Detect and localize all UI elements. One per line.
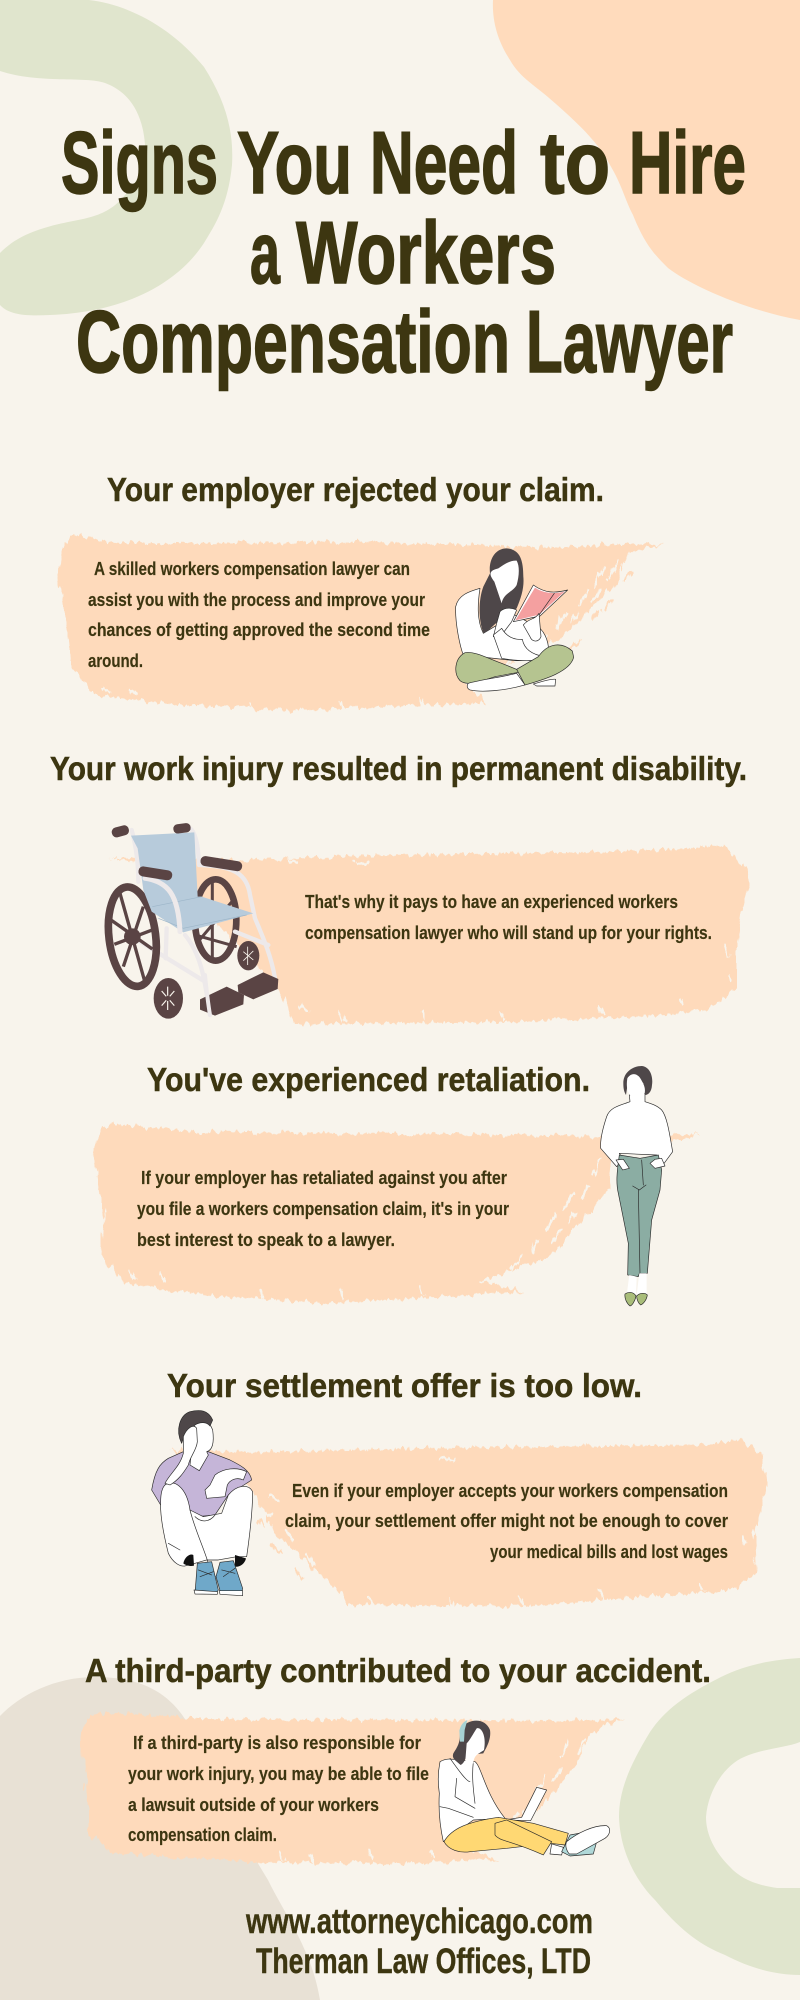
body text 4: Even if your employer accepts your workers compensation [292, 1481, 728, 1501]
title: Compensation [76, 292, 510, 391]
body text 2: compensation lawyer who will stand up for your rights. [305, 923, 712, 943]
illustration: woman with laptop [438, 1720, 610, 1856]
heading 2: Your work injury resulted in permanent disability. [50, 750, 747, 787]
body text 3: best interest to speak to a lawyer. [137, 1230, 395, 1250]
illustration: standing woman [601, 1066, 673, 1306]
body text 3: If your employer has retaliated against you after [141, 1168, 507, 1188]
body text 5: If a third-party is also responsible for [133, 1733, 421, 1753]
footer: website and firm name: Therman Law Offices, LTD [256, 1942, 591, 1981]
illustration: woman reading a book [456, 548, 574, 691]
title: Need [370, 113, 518, 212]
body text 4 [285, 1481, 728, 1562]
section 1: rejected claim [58, 471, 663, 710]
title [61, 113, 746, 391]
body text 1: A skilled workers compensation lawyer can [94, 559, 410, 579]
illustration: man sitting with hand on face [152, 1411, 253, 1596]
brush panel 4 [170, 1439, 766, 1606]
body text 1: chances of getting approved the second time [88, 620, 430, 640]
body text 2 [305, 892, 712, 943]
body text 1 [88, 559, 430, 671]
body text 1: assist you with the process and improve your [88, 590, 425, 610]
section 3: retaliation [93, 1061, 700, 1306]
title: Hire [629, 113, 746, 212]
heading 3: You've experienced retaliation. [147, 1061, 590, 1098]
blob: beige bottom left [0, 1677, 320, 2000]
heading 4: Your settlement offer is too low. [167, 1367, 642, 1404]
title: You [237, 113, 352, 212]
body text 2: That's why it pays to have an experienced workers [305, 892, 678, 912]
title: a [250, 203, 281, 302]
body text 5: your work injury, you may be able to file [128, 1764, 429, 1784]
section 2: permanent disability [50, 750, 748, 1024]
heading 1: Your employer rejected your claim. [107, 471, 604, 508]
illustration: wheelchair [103, 823, 278, 1019]
title: Workers [296, 203, 556, 302]
body text 5: compensation claim. [128, 1825, 277, 1845]
section 4: settlement offer too low [152, 1367, 766, 1606]
brush panel 5 [81, 1712, 624, 1864]
blob: green bottom right [619, 1658, 800, 1975]
brush panel 2 [109, 845, 748, 1024]
body text 4: your medical bills and lost wages [490, 1542, 728, 1562]
body text 3 [137, 1168, 509, 1250]
heading 5: A third-party contributed to your accident. [85, 1652, 711, 1689]
blob: peach top right [493, 0, 800, 320]
body text 5: a lawsuit outside of your workers [128, 1795, 379, 1815]
title: to [540, 113, 610, 212]
footer: website and firm name: www.attorneychicago.com [245, 1902, 593, 1941]
brush panel 3 [93, 1124, 700, 1303]
body text 4: claim, your settlement offer might not be enough to cover [285, 1511, 728, 1531]
title: Signs [61, 113, 218, 212]
body text 1: around. [88, 651, 143, 671]
body text 5 [128, 1733, 429, 1845]
footer: website and firm name [245, 1902, 593, 1981]
blob: green top left [0, 0, 232, 315]
brush panel 1 [58, 536, 663, 710]
body text 3: you file a workers compensation claim, it's in your [137, 1199, 509, 1219]
section 5: third party [81, 1652, 711, 1864]
